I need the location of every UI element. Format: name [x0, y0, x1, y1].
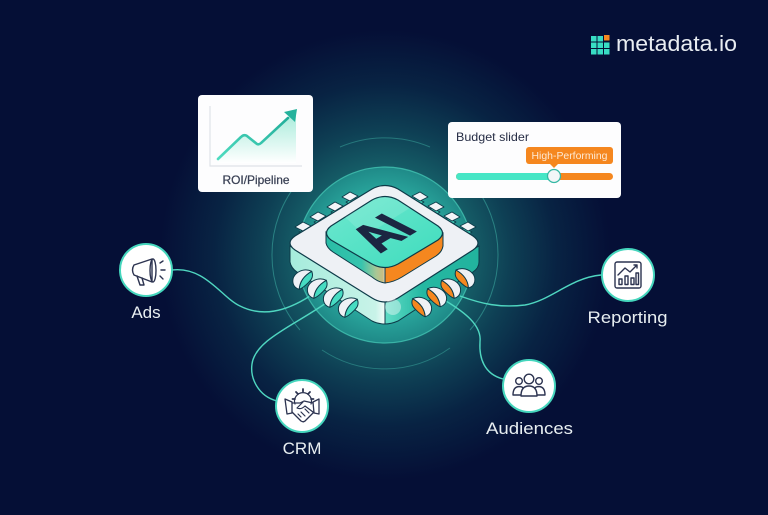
node: Reporting	[588, 249, 668, 327]
card: ROI/Pipeline	[198, 95, 313, 192]
icon: megaphone	[132, 259, 165, 285]
central glow	[160, 30, 610, 480]
icon: people	[513, 374, 545, 396]
chip front left pins	[293, 270, 358, 317]
chip base top	[290, 186, 478, 302]
slider track	[456, 173, 613, 180]
logo: metadata.io	[591, 31, 737, 56]
tooltip	[526, 147, 613, 168]
icon: framed chart	[615, 262, 641, 288]
chart: axes	[210, 106, 302, 166]
chip center glint	[385, 299, 401, 315]
slider thumb	[548, 170, 560, 182]
line: Audiences	[446, 301, 503, 379]
node: Audiences	[486, 360, 573, 438]
logo text: metadata.io	[616, 31, 737, 56]
AI chip	[290, 186, 479, 324]
logo mark	[591, 35, 610, 54]
line: Ads	[172, 270, 310, 312]
chart: arrow head	[284, 109, 297, 122]
slider title: Budget slider	[456, 130, 529, 144]
connector lines	[172, 270, 601, 401]
AI block top	[326, 196, 442, 268]
line: Reporting	[460, 275, 601, 306]
icon: handshake with gear	[285, 389, 319, 422]
chip back pins	[295, 192, 476, 237]
chart: area under line	[218, 110, 296, 163]
AI letters: AI	[336, 207, 429, 259]
label: Audiences	[486, 419, 573, 438]
concentric rings	[272, 138, 498, 369]
card: Budget slider	[448, 122, 621, 198]
label: CRM	[283, 439, 321, 458]
card label: ROI/Pipeline	[222, 173, 290, 187]
tooltip: High-Performing	[532, 150, 608, 162]
line: CRM	[252, 303, 326, 401]
chip front right pins	[412, 269, 475, 317]
node: CRM	[276, 380, 328, 458]
label: Ads	[131, 303, 161, 322]
label: Reporting	[588, 308, 668, 327]
chip base side	[385, 246, 479, 324]
block glare	[345, 197, 410, 236]
node: Ads	[120, 244, 172, 322]
chart: trend line	[218, 118, 288, 159]
AI block side	[326, 232, 385, 283]
